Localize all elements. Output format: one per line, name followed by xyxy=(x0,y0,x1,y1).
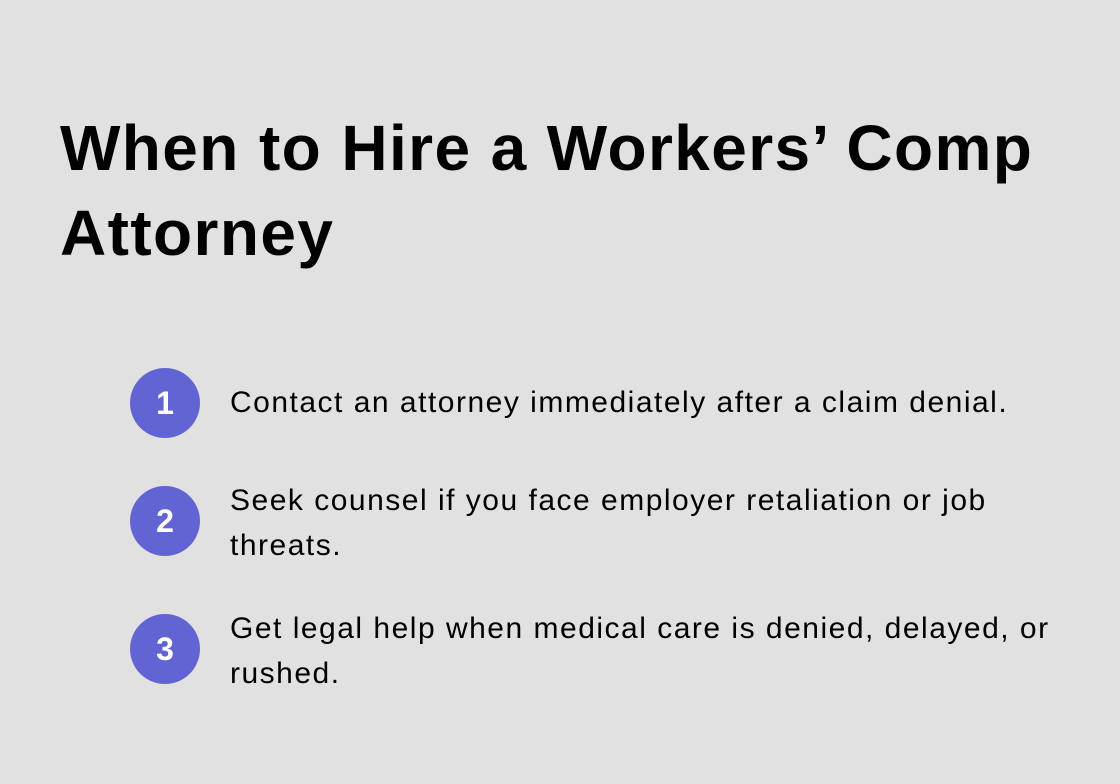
text 3 xyxy=(230,612,1050,690)
badge 2 xyxy=(130,486,200,556)
item 3 xyxy=(130,612,1050,690)
item 2 xyxy=(130,484,987,562)
text 3: rushed. xyxy=(230,657,341,690)
text 2: Seek counsel if you face employer retaliation or job xyxy=(230,484,987,517)
badge 3 xyxy=(130,614,200,684)
text 2: threats. xyxy=(230,529,342,562)
text 2 xyxy=(230,484,987,562)
title: When to Hire a Workers’ Comp xyxy=(60,112,1033,184)
text 3: Get legal help when medical care is denied, delayed, or xyxy=(230,612,1050,645)
title xyxy=(60,112,1033,269)
text 1: Contact an attorney immediately after a claim denial. xyxy=(230,386,1008,419)
badge 2: 2 xyxy=(156,503,174,539)
badge 3: 3 xyxy=(156,631,174,667)
item 1 xyxy=(130,368,1008,438)
badge 1 xyxy=(130,368,200,438)
title: Attorney xyxy=(60,197,334,269)
badge 1: 1 xyxy=(156,385,174,421)
